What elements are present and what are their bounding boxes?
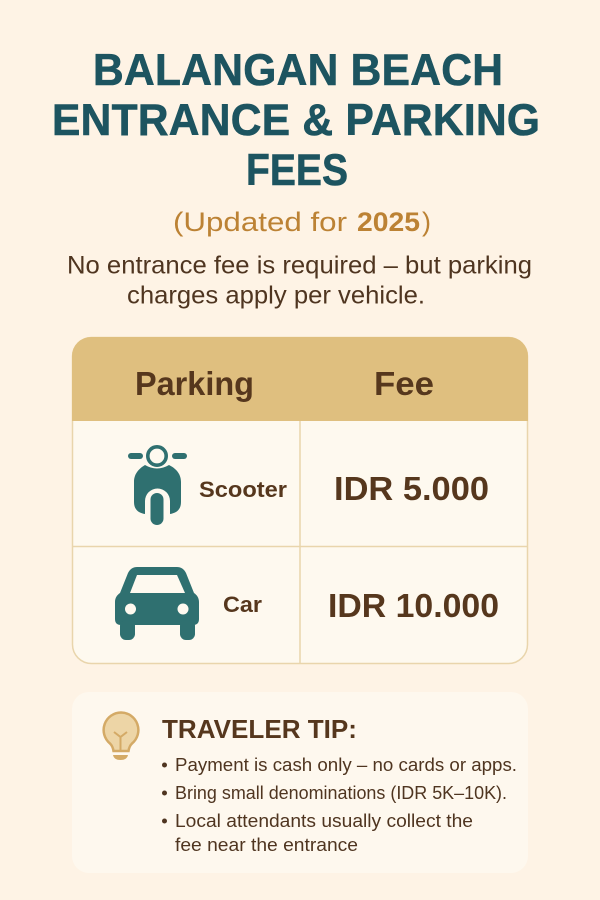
tip list: fee near the entrance: [175, 835, 358, 855]
tip list: Bring small denominations (IDR 5K–10K).: [175, 783, 507, 803]
table header: Fee: [374, 365, 434, 402]
title: ENTRANCE & PARKING: [52, 96, 540, 145]
icon: car: [115, 567, 199, 640]
intro text: [67, 252, 532, 310]
title: [52, 46, 540, 195]
tip list: Payment is cash only – no cards or apps.: [175, 755, 517, 775]
title: BALANGAN BEACH: [93, 46, 503, 95]
table header: [72, 337, 528, 421]
panel: traveler tip: [72, 692, 528, 873]
title: FEES: [246, 146, 348, 195]
tip list: Local attendants usually collect the: [175, 811, 473, 831]
car fee: IDR 10.000: [328, 587, 499, 624]
tip list: [162, 755, 517, 855]
icon: scooter: [128, 447, 187, 525]
scooter fee: IDR 5.000: [334, 470, 489, 507]
tip heading: TRAVELER TIP:: [162, 714, 357, 744]
car label: Car: [223, 592, 262, 617]
subtitle: (Updated for: [173, 207, 347, 237]
icon: light bulb: [104, 712, 138, 760]
subtitle: [173, 207, 431, 237]
subtitle: 2025: [357, 207, 420, 237]
subtitle: ): [422, 207, 431, 237]
fee table: [72, 337, 528, 664]
intro text: No entrance fee is required – but parking: [67, 252, 532, 280]
intro text: charges apply per vehicle.: [127, 282, 425, 310]
table body: [72, 338, 528, 664]
scooter label: Scooter: [199, 477, 287, 502]
table header: Parking: [135, 365, 254, 402]
